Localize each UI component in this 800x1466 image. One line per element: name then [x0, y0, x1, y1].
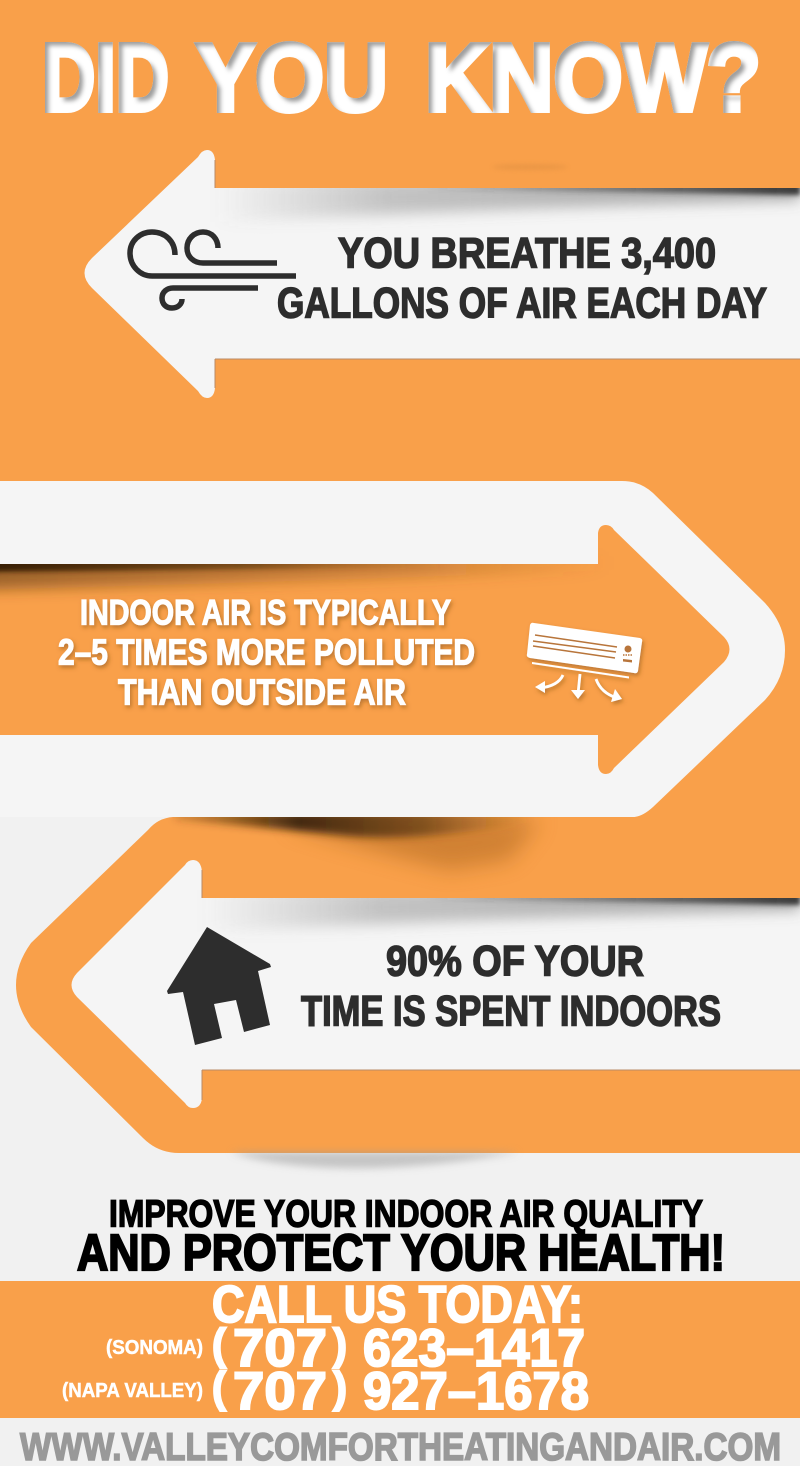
- arrow 1 text: YOU BREATHE 3,400: [338, 230, 716, 277]
- faint shadow on orange: [492, 164, 568, 170]
- contact text: (SONOMA): [106, 1337, 203, 1359]
- title: KNOW?: [425, 24, 761, 132]
- arrow 3 top shadow: [231, 898, 800, 932]
- orange outer arrow band: [16, 817, 800, 1153]
- contact text: 707: [233, 1319, 327, 1378]
- orange inner arrow: [0, 525, 730, 774]
- contact text: (NAPA VALLEY): [62, 1380, 203, 1402]
- arrow 3 edge shading: [202, 870, 800, 1100]
- title: YOU: [196, 24, 388, 132]
- white outer arrow band: [0, 481, 785, 817]
- panel: arrow 1, air volume: [84, 150, 800, 398]
- arrow 3 text: [301, 938, 721, 1035]
- contact text: 707: [233, 1362, 327, 1421]
- panel: contact band: [0, 1276, 800, 1421]
- arrow 2 text: INDOOR AIR IS TYPICALLY: [80, 594, 451, 632]
- panel: arrow 3, time indoors: [16, 812, 800, 1153]
- panel: arrow 2, polluted indoor air: [0, 481, 785, 817]
- contact text: ): [333, 1363, 347, 1412]
- icon: air conditioner: [527, 623, 642, 702]
- icon: house: [167, 927, 271, 1045]
- call to action heading: [77, 1193, 725, 1281]
- contact text: 927–1678: [363, 1362, 589, 1421]
- arrow 2 text: THAN OUTSIDE AIR: [118, 672, 406, 712]
- contact text: ): [333, 1320, 347, 1369]
- contact text: (: [212, 1363, 226, 1412]
- contact text: (: [212, 1320, 226, 1369]
- title: DID: [42, 24, 169, 132]
- arrow 2 text: [58, 594, 475, 712]
- arrow 3 text: 90% OF YOUR: [386, 938, 644, 985]
- call to action heading: IMPROVE YOUR INDOOR AIR QUALITY: [109, 1193, 703, 1235]
- contact text: 623–1417: [363, 1319, 585, 1378]
- icon: wind: [130, 232, 296, 308]
- title: [42, 24, 761, 132]
- contact band background: [0, 1281, 800, 1418]
- arrow 2 top shadow: [0, 556, 610, 590]
- contact text: CALL US TODAY:: [212, 1276, 583, 1334]
- contact text: [62, 1276, 589, 1421]
- arrow 1 shape: [84, 150, 800, 398]
- arrow 1 edge shading: [215, 160, 800, 388]
- arrow 1 top shadow: [244, 188, 800, 222]
- orange field: [0, 0, 800, 1153]
- arrow 2 text: 2–5 TIMES MORE POLLUTED: [58, 632, 475, 672]
- band top shadow: [175, 812, 540, 870]
- arrow 1 text: [277, 230, 767, 327]
- white inner arrow: [72, 860, 800, 1108]
- shadow beneath arrow 3: [230, 1152, 520, 1168]
